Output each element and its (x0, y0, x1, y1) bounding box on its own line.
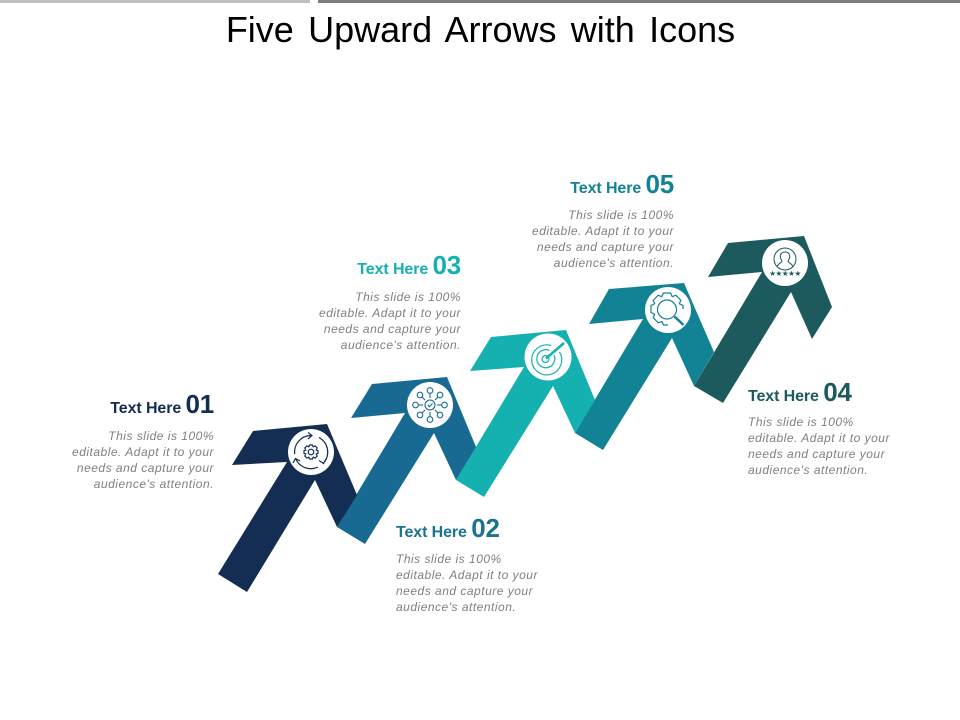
arrow 02 (337, 377, 476, 544)
text block 02: editable. Adapt it to your (396, 568, 538, 582)
text block 05: Text Here 05 (570, 169, 674, 199)
icon: gear with cycle arrows (288, 429, 334, 475)
text block 05 (532, 169, 674, 270)
arrow 04 (575, 283, 714, 450)
text block 04: Text Here 04 (748, 377, 852, 407)
text block 03: needs and capture your (324, 322, 461, 336)
text block 03: Text Here 03 (357, 250, 461, 280)
icon: user with five stars (762, 240, 808, 286)
arrow 01 (218, 424, 357, 592)
text block 03 (319, 250, 461, 352)
text block 03: editable. Adapt it to your (319, 306, 461, 320)
text block 01: This slide is 100% (108, 429, 214, 443)
text block 05: needs and capture your (537, 240, 674, 254)
top bar left (0, 0, 310, 3)
text block 05: This slide is 100% (568, 208, 674, 222)
text block 02: Text Here 02 (396, 513, 500, 543)
icon: user with five stars: ★★★★★ (769, 269, 801, 278)
text block 05: audience's attention. (554, 256, 674, 270)
arrow 05 (694, 236, 832, 403)
icon: gear with magnifier (645, 287, 691, 333)
text block 04: audience's attention. (748, 463, 868, 477)
text block 01: needs and capture your (77, 461, 214, 475)
arrow 03 (456, 330, 595, 497)
text block 04: needs and capture your (748, 447, 885, 461)
text block 02: This slide is 100% (396, 552, 502, 566)
text block 03: This slide is 100% (355, 290, 461, 304)
text block 02: audience's attention. (396, 600, 516, 614)
icon: network with check (407, 382, 453, 428)
title: Five Upward Arrows with Icons (226, 9, 735, 50)
text block 01: audience's attention. (94, 477, 214, 491)
top bar right (318, 0, 960, 3)
text block 04: editable. Adapt it to your (748, 431, 890, 445)
icon: target with dart (524, 334, 572, 380)
text block 03: audience's attention. (341, 338, 461, 352)
text block 02 (396, 513, 538, 614)
text block 04 (748, 377, 890, 477)
text block 05: editable. Adapt it to your (532, 224, 674, 238)
text block 04: This slide is 100% (748, 415, 854, 429)
text block 01: editable. Adapt it to your (72, 445, 214, 459)
text block 01 (72, 389, 214, 491)
text block 02: needs and capture your (396, 584, 533, 598)
text block 01: Text Here 01 (110, 389, 214, 419)
